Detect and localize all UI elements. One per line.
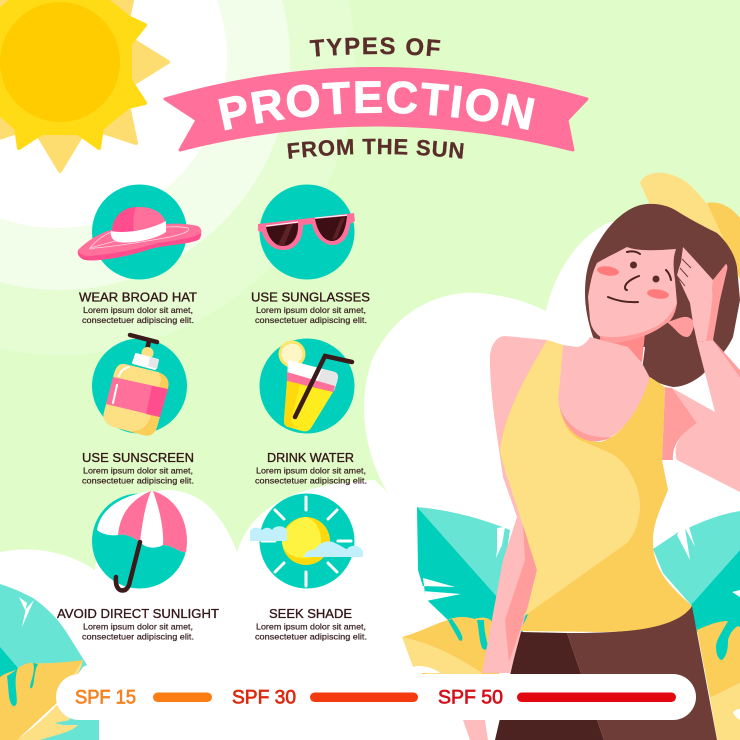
text: description xyxy=(82,622,194,642)
ribbon xyxy=(165,68,587,150)
heading: drink water: DRINK WATER xyxy=(267,450,354,465)
forearm and right chest xyxy=(672,340,740,492)
heading: use sunscreen: USE SUNSCREEN xyxy=(82,450,194,465)
label: SPF 50: SPF 50 xyxy=(438,686,503,708)
icon: sun xyxy=(0,0,168,171)
label: SPF 15: SPF 15 xyxy=(75,686,136,708)
heading: wear broad hat: WEAR BROAD HAT xyxy=(79,290,197,304)
shorts xyxy=(495,632,604,740)
hat brim xyxy=(640,173,735,260)
text: description: Lorem ipsum dolor sit amet, xyxy=(83,622,193,632)
text: description: consectetuer adipiscing elit. xyxy=(82,476,194,486)
heading: protection: PROTECTION xyxy=(218,81,535,130)
face details xyxy=(596,251,671,302)
label: SPF 30: SPF 30 xyxy=(232,686,296,708)
illustration: woman xyxy=(482,173,740,740)
icon: hat xyxy=(78,207,201,260)
panel: SPF scale bar xyxy=(56,674,696,720)
text: description xyxy=(255,622,367,642)
text: description: Lorem ipsum dolor sit amet, xyxy=(256,466,366,476)
panel: wear broad hat xyxy=(78,184,201,325)
panel: seek shade xyxy=(250,494,367,642)
text: description: consectetuer adipiscing elit. xyxy=(255,315,367,325)
panel: use sunscreen xyxy=(82,335,194,486)
heading: use sunglasses: USE SUNGLASSES xyxy=(251,290,370,304)
text: description: consectetuer adipiscing elit. xyxy=(82,315,194,325)
text: description: Lorem ipsum dolor sit amet, xyxy=(83,305,193,315)
text: description: Lorem ipsum dolor sit amet, xyxy=(256,305,366,315)
heading: from the sun: FROM THE SUN xyxy=(287,138,464,159)
text: description: consectetuer adipiscing elit. xyxy=(82,632,194,642)
heading: avoid direct sunlight: AVOID DIRECT SUNLIGHT xyxy=(57,606,219,621)
heading: seek shade: SEEK SHADE xyxy=(269,606,352,621)
text: description: consectetuer adipiscing elit. xyxy=(255,476,367,486)
tank top xyxy=(500,340,692,632)
illustration: right leaves xyxy=(402,507,740,740)
icon: sunscreen bottle xyxy=(103,335,169,436)
icon: sun and clouds xyxy=(250,497,363,586)
text: description xyxy=(82,305,194,325)
panel: drink water xyxy=(255,338,367,486)
hand xyxy=(677,247,713,342)
text: description: Lorem ipsum dolor sit amet, xyxy=(256,622,366,632)
illustration: bottom-left leaves xyxy=(0,584,99,740)
hair xyxy=(585,204,740,387)
left arm xyxy=(482,336,547,673)
text: description: Lorem ipsum dolor sit amet, xyxy=(83,466,193,476)
icon: sunglasses xyxy=(258,213,355,250)
title xyxy=(163,37,588,159)
text: description xyxy=(255,305,367,325)
icon: umbrella xyxy=(97,491,187,590)
heading: types of: TYPES OF xyxy=(310,37,440,57)
text: description xyxy=(255,466,367,486)
ear xyxy=(667,317,694,337)
text: description xyxy=(82,466,194,486)
icon: drink xyxy=(278,340,352,431)
text: description: consectetuer adipiscing elit. xyxy=(255,632,367,642)
chest xyxy=(558,337,650,441)
panel: use sunglasses xyxy=(251,184,370,325)
panel: avoid direct sunlight xyxy=(57,491,219,642)
face xyxy=(588,247,677,340)
neck shade xyxy=(600,333,645,363)
